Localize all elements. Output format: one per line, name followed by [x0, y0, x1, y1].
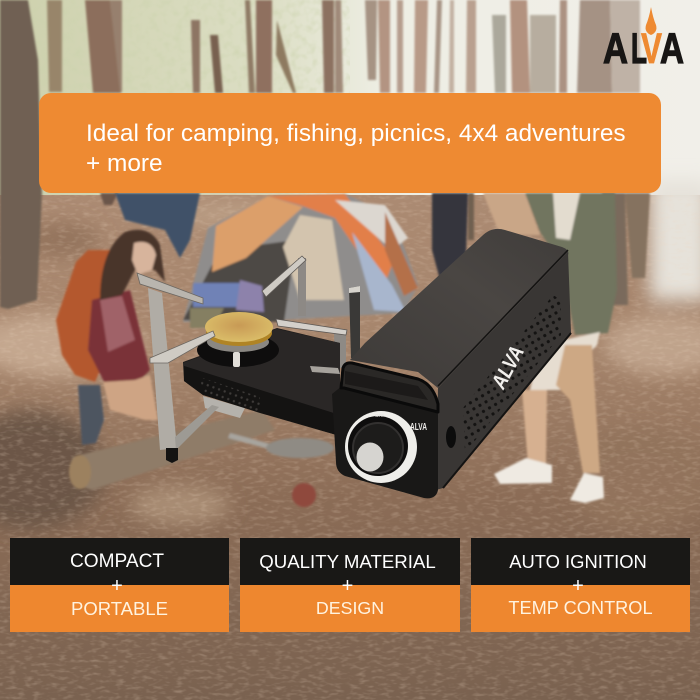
feature card: compact + portable: PORTABLE	[71, 598, 168, 619]
feature card: quality material + design	[240, 538, 460, 632]
handle	[341, 363, 438, 412]
feature card: quality material + design: +	[342, 575, 353, 597]
tent	[183, 194, 418, 328]
camper kneeling, red plaid shirt	[56, 230, 165, 445]
feature card: auto ignition + temp control: AUTO IGNITION	[509, 551, 647, 572]
control dial: OFF	[375, 413, 384, 418]
rear-right support bar	[276, 319, 347, 335]
logo wordmark	[603, 25, 684, 73]
log, pan and red cup on ground	[69, 410, 334, 507]
feature card: auto ignition + temp control: +	[572, 575, 584, 597]
logo wordmark: L	[631, 25, 647, 73]
front panel	[332, 386, 438, 498]
feature card: auto ignition + temp control: TEMP CONTROL	[508, 598, 653, 618]
camper in dark shirt	[432, 193, 468, 280]
feature card: quality material + design: QUALITY MATERIAL	[259, 551, 436, 572]
logo flame	[646, 7, 656, 35]
feature card: compact + portable: COMPACT	[70, 551, 164, 572]
fuel compartment side	[436, 252, 571, 490]
camper with blue shirt behind tent	[115, 193, 200, 258]
silver undercarriage	[203, 396, 245, 418]
camper with green jacket	[483, 193, 617, 503]
foot plate	[310, 366, 340, 374]
banner: ideal uses	[39, 93, 661, 193]
banner: ideal uses: Ideal for camping, fishing, picnics, 4x4 adventures	[86, 120, 626, 147]
side port	[446, 426, 456, 448]
feature card: compact + portable: +	[111, 575, 123, 597]
feature card: quality material + design: DESIGN	[316, 598, 384, 618]
ground	[0, 195, 700, 700]
trees	[0, 0, 650, 309]
feature card: compact + portable	[10, 538, 229, 632]
logo wordmark: A	[603, 25, 628, 73]
side vent holes	[463, 295, 561, 453]
fuel compartment top	[350, 229, 568, 388]
compartment edge line	[438, 250, 568, 386]
banner: ideal uses: + more	[86, 150, 163, 177]
logo wordmark: V	[641, 25, 662, 73]
ALVA label on panel: ALVA	[410, 421, 427, 433]
front-left pot support and leg	[137, 273, 219, 463]
burner	[197, 312, 279, 367]
logo wordmark: A	[660, 25, 684, 73]
ALVA label on side: ALVA	[488, 341, 528, 394]
control dial	[345, 411, 417, 483]
feature card: auto ignition + temp control	[471, 538, 690, 632]
rear pot support arms	[262, 256, 360, 368]
stove base	[183, 328, 340, 436]
